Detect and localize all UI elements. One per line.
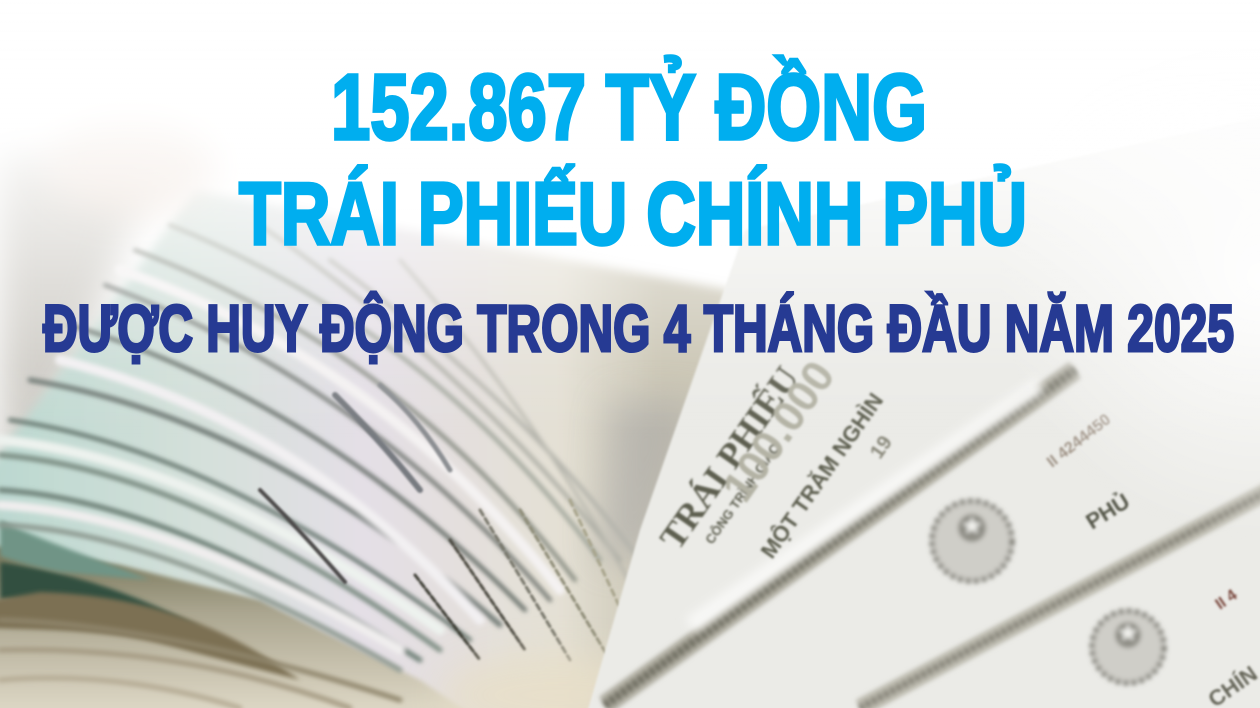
photo: lower stack of notes xyxy=(0,545,480,708)
photo: printed text on bond: PHỦ xyxy=(1081,488,1134,534)
photo: printed text on bond: 100.000 xyxy=(713,352,844,511)
photo: fan of banknotes xyxy=(0,190,730,708)
photo: left edge shadow xyxy=(0,150,150,500)
photo: dark teal and brown notes xyxy=(0,562,200,628)
photo: printed text on bond xyxy=(652,352,1260,708)
photo: hand at upper left xyxy=(45,117,215,213)
photo: printed text on bond: TRÁI PHIẾU xyxy=(652,359,807,557)
photo: printed text on bond: 19 xyxy=(866,432,897,463)
photo: printed text on bond: II 4244450 xyxy=(1044,411,1114,471)
photo: emblems on notes xyxy=(932,501,1164,683)
title: government bonds: TRÁI PHIẾU CHÍNH PHỦ xyxy=(239,164,1027,263)
photo: decorative note bands xyxy=(605,370,1260,708)
photo: dark streaks in fan xyxy=(335,395,420,490)
photo: printed text on bond: CÔNG TRÌNH GIAO xyxy=(702,440,783,547)
photo: light page highlights xyxy=(60,360,480,620)
photo: shaded pages at fan right xyxy=(600,400,700,560)
photo: cream centre of fan xyxy=(440,655,680,708)
photo: printed text on bond: MỘT TRĂM NGHÌN xyxy=(756,388,888,563)
photo: printed text on bond: II 4 xyxy=(1213,587,1241,613)
photo: government bond notes xyxy=(585,110,1260,708)
title: amount: 152.867 TỶ ĐỒNG xyxy=(331,55,927,159)
